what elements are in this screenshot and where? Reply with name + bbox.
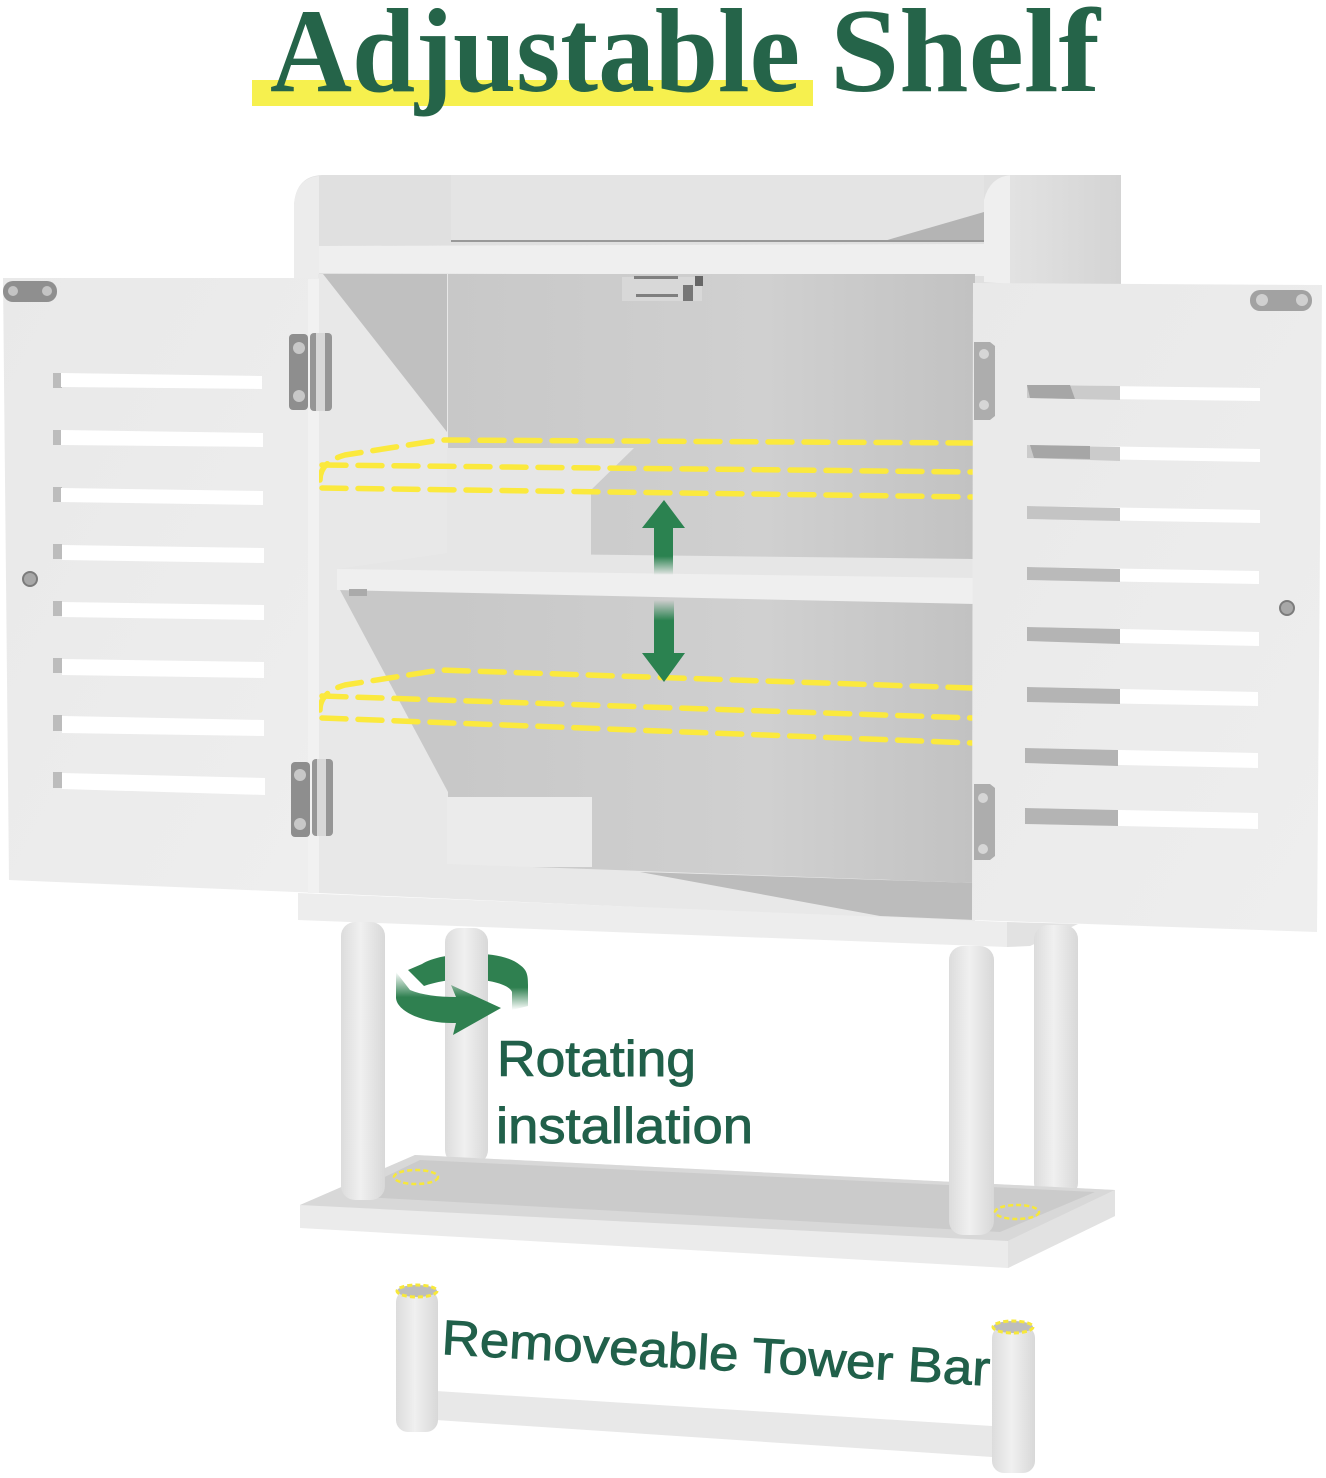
label: rotating installation: Rotating <box>497 1031 696 1087</box>
removable towel bar <box>396 1285 1035 1473</box>
cabinet bottom shelf <box>298 864 1078 947</box>
cabinet interior <box>318 274 975 894</box>
right door bracket <box>1250 290 1312 311</box>
shelf up and down arrow <box>642 500 685 682</box>
yellow dashed shelf positions <box>320 440 972 743</box>
icon: rotation arrow, front band <box>396 972 501 1035</box>
lower left hinge <box>291 759 333 837</box>
front poles <box>341 922 994 1235</box>
base platform <box>300 1155 1115 1268</box>
yellow dashed mount rings <box>394 1170 1039 1219</box>
right door <box>972 283 1322 932</box>
right door slats <box>1025 385 1260 829</box>
label: rotating installation: installation <box>496 1098 753 1154</box>
upper left hinge <box>289 333 332 411</box>
right door knob <box>1280 601 1294 615</box>
cabinet top section <box>294 175 1121 284</box>
label: rotating installation <box>496 1031 753 1154</box>
adjustable shelf <box>337 553 975 604</box>
right hinges <box>974 342 995 860</box>
label: removeable tower bar: Removeable Tower Bar <box>440 1311 992 1397</box>
left door bracket <box>3 281 57 302</box>
left door knob <box>23 572 37 586</box>
left door <box>3 278 319 893</box>
rear poles <box>445 925 1078 1197</box>
title <box>252 0 1102 117</box>
left door slats <box>53 373 265 795</box>
left hinges <box>289 333 333 837</box>
latch <box>622 276 703 301</box>
icon: rotation arrow, back band <box>408 954 528 1010</box>
cabinet body <box>294 175 1121 947</box>
